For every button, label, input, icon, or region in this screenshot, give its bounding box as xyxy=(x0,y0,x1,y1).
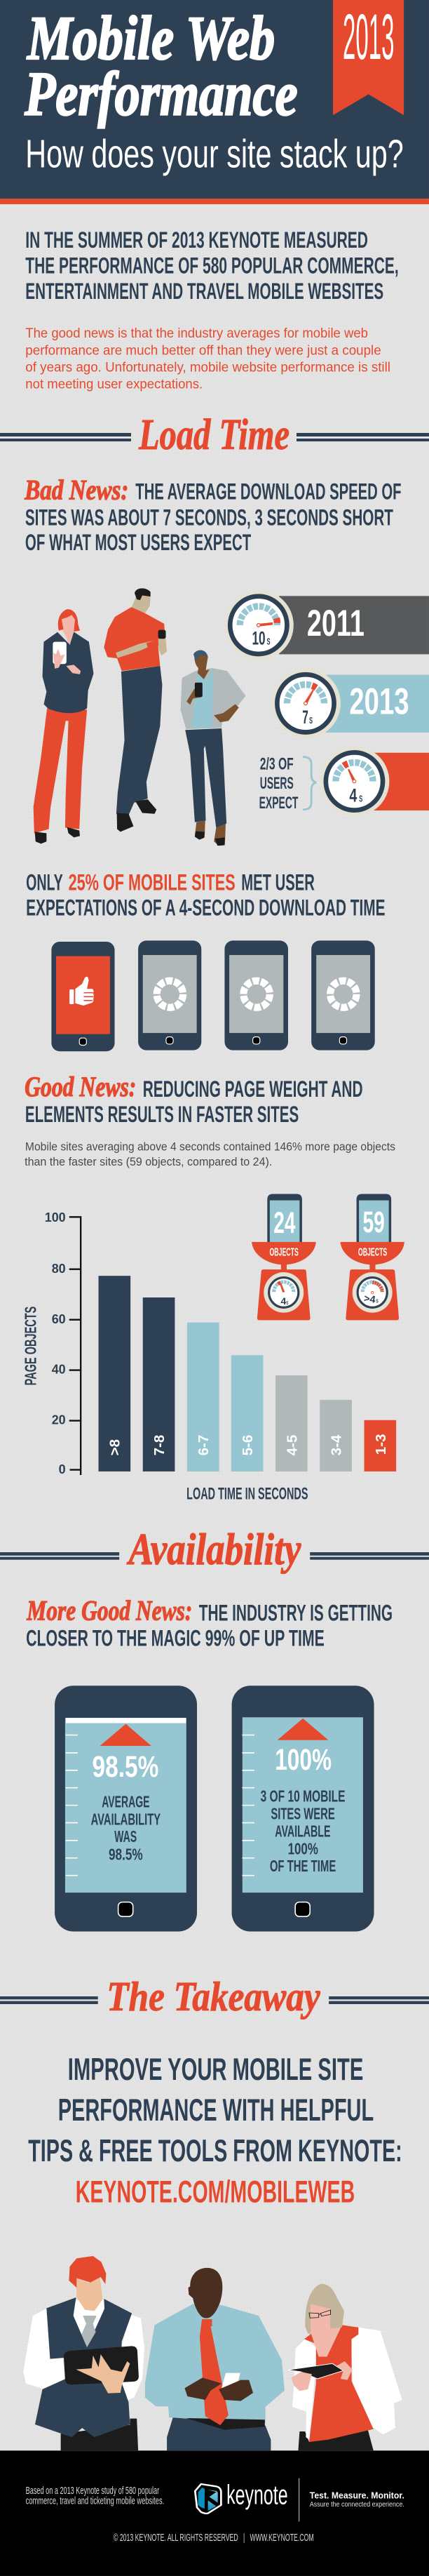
more good news heading xyxy=(26,1594,393,1650)
divider and tagline: Test. Measure. Monitor. xyxy=(310,2491,404,2501)
intro paragraph xyxy=(25,326,390,392)
more good news heading: More Good News: xyxy=(26,1594,192,1627)
source note: commerce, travel and ticketing mobile websites. xyxy=(26,2495,164,2507)
source note: Based on a 2013 Keynote study of 580 popular xyxy=(26,2485,160,2497)
good news heading: Good News: xyxy=(25,1071,136,1102)
y axis: 40 xyxy=(52,1363,66,1377)
section heading: Availability xyxy=(0,1525,429,1574)
body text xyxy=(25,1140,395,1168)
phone: 98.5 percent: 98.5% xyxy=(93,1750,158,1783)
panel: footer illustration xyxy=(23,2256,402,2450)
bad news heading xyxy=(24,474,402,555)
section heading: Availability: Availability xyxy=(126,1525,301,1574)
phone: loading 2 xyxy=(224,940,288,1050)
scale: 59 objects: S xyxy=(376,1299,379,1304)
scale: 24 objects: OBJECTS xyxy=(269,1247,299,1259)
footer xyxy=(0,2450,429,2576)
phone: 100 percent xyxy=(232,1686,374,1932)
gauge: 10 seconds xyxy=(225,590,294,660)
phone: 100 percent: 100% xyxy=(275,1743,332,1776)
title xyxy=(24,4,298,128)
figure: man in blue shirt xyxy=(145,2268,285,2450)
logo: keynote: keynote xyxy=(226,2479,288,2510)
source note xyxy=(26,2485,164,2507)
icon: thumbs up xyxy=(69,977,94,1006)
bars: 7-8 xyxy=(152,1435,168,1455)
phone: 100 percent: 100% xyxy=(288,1839,318,1858)
panel: takeaway xyxy=(0,1973,429,2209)
intro block xyxy=(25,227,399,392)
header banner xyxy=(0,0,429,204)
y axis title: PAGE OBJECTS xyxy=(22,1307,39,1385)
phone: 100 percent: OF THE TIME xyxy=(270,1857,336,1875)
phone: thumbs up xyxy=(51,942,115,1051)
phone: loading 3 xyxy=(311,940,375,1050)
panel: availability xyxy=(0,1525,429,1932)
year ribbon xyxy=(333,0,404,115)
phone: 98.5 percent: AVERAGE xyxy=(102,1792,149,1810)
intro paragraph: The good news is that the industry averages for mobile web xyxy=(25,326,368,340)
phone: 98.5 percent: 98.5% xyxy=(109,1845,143,1864)
gauge: 4 seconds: 4 xyxy=(349,785,358,806)
section heading: Load Time: Load Time xyxy=(138,411,290,459)
year bar: 2011: 2011 xyxy=(307,603,365,644)
figure: woman with orange trousers xyxy=(34,609,93,843)
bars xyxy=(99,1276,396,1471)
bars: 4-5 xyxy=(285,1435,300,1455)
body text: Mobile sites averaging above 4 seconds contained 146% more page objects xyxy=(25,1140,395,1153)
intro paragraph: performance are much better off than they were just a couple xyxy=(25,342,381,357)
scale: 59 objects xyxy=(341,1194,404,1320)
title: Performance xyxy=(24,60,298,128)
gauge: 7 seconds xyxy=(272,669,341,738)
scale: 59 objects: 59 xyxy=(363,1206,385,1239)
y axis: 20 xyxy=(52,1413,66,1427)
figure: woman with tablet xyxy=(288,2284,402,2450)
label: 2/3 of users expect: 2/3 OF xyxy=(260,754,294,773)
scale: 59 objects: OBJECTS xyxy=(358,1247,387,1259)
panel: 25 percent of sites xyxy=(25,869,395,1168)
label: 2/3 of users expect: USERS xyxy=(260,774,294,793)
bad news heading: Bad News: xyxy=(24,474,128,506)
good news heading xyxy=(25,1071,363,1127)
scale: 24 objects xyxy=(252,1194,316,1320)
section heading: The Takeaway xyxy=(0,1973,429,2020)
phone: 100 percent: AVAILABLE xyxy=(275,1822,330,1840)
y axis xyxy=(45,1210,81,1476)
x axis title: LOAD TIME IN SECONDS xyxy=(186,1484,308,1502)
intro heading xyxy=(25,227,399,304)
label: 2/3 of users expect: EXPECT xyxy=(259,794,298,813)
year bar: 2013 xyxy=(325,675,429,733)
figure: tall man in orange shirt xyxy=(104,588,167,832)
intro paragraph: not meeting user expectations. xyxy=(25,376,203,392)
y axis: 80 xyxy=(52,1262,66,1276)
statement heading: MET USER xyxy=(241,869,315,895)
y axis: 60 xyxy=(52,1312,66,1326)
bars: 1-3 xyxy=(374,1434,389,1455)
panel: page objects chart xyxy=(22,1194,404,1502)
gauge: 4 seconds xyxy=(321,747,389,816)
title: Mobile Web xyxy=(26,4,275,73)
brace xyxy=(303,757,316,810)
phone: loading 1 xyxy=(138,940,201,1050)
year bar: 2013: 2013 xyxy=(349,681,409,722)
gauge: 10 seconds: 10 xyxy=(252,627,266,649)
scale: 24 objects: S xyxy=(286,1301,289,1306)
statement heading xyxy=(26,869,386,920)
logo: keynote xyxy=(195,2479,288,2514)
y axis: 100 xyxy=(45,1210,66,1224)
phone: 100 percent: SITES WERE xyxy=(271,1804,335,1822)
phone: 98.5 percent xyxy=(55,1686,197,1932)
bars: 6-7 xyxy=(196,1435,212,1455)
y axis: 0 xyxy=(59,1462,66,1476)
statement heading: ONLY xyxy=(26,869,63,895)
statement heading: 25% OF MOBILE SITES xyxy=(69,869,236,895)
phone: 100 percent: 3 OF 10 MOBILE xyxy=(261,1787,346,1806)
body text: than the faster sites (59 objects, compared to 24). xyxy=(25,1156,272,1168)
call to action xyxy=(28,2052,402,2209)
divider and tagline xyxy=(299,2478,404,2521)
label: 2/3 of users expect xyxy=(259,754,298,813)
gauge: 10 seconds: S xyxy=(267,636,271,647)
gauge: 7 seconds: 7 xyxy=(302,707,308,728)
scale: 24 objects: 24 xyxy=(273,1206,296,1239)
gauge: 4 seconds: S xyxy=(359,794,362,804)
panel: load time figures xyxy=(24,474,429,846)
figure: man with tablet xyxy=(23,2256,144,2450)
bars: 3-4 xyxy=(329,1434,345,1455)
gauge: 7 seconds: S xyxy=(309,716,313,726)
figure: woman in grey cardigan xyxy=(181,650,245,846)
intro paragraph: of years ago. Unfortunately, mobile website performance is still xyxy=(25,359,390,374)
section heading: The Takeaway: The Takeaway xyxy=(107,1973,320,2020)
bars: >8 xyxy=(108,1439,123,1455)
section heading: Load Time xyxy=(0,411,429,459)
scale: 59 objects: >4 xyxy=(363,1293,376,1305)
year bar: 2011 xyxy=(279,596,429,654)
phone: 98.5 percent: AVAILABILITY xyxy=(91,1810,161,1828)
expected bar: 4 seconds xyxy=(374,753,429,810)
bars: 5-6 xyxy=(240,1435,256,1455)
phone: 98.5 percent: WAS xyxy=(114,1827,137,1846)
scale: 24 objects: 4 xyxy=(280,1295,286,1307)
bad news heading: OF WHAT MOST USERS EXPECT xyxy=(25,530,252,555)
